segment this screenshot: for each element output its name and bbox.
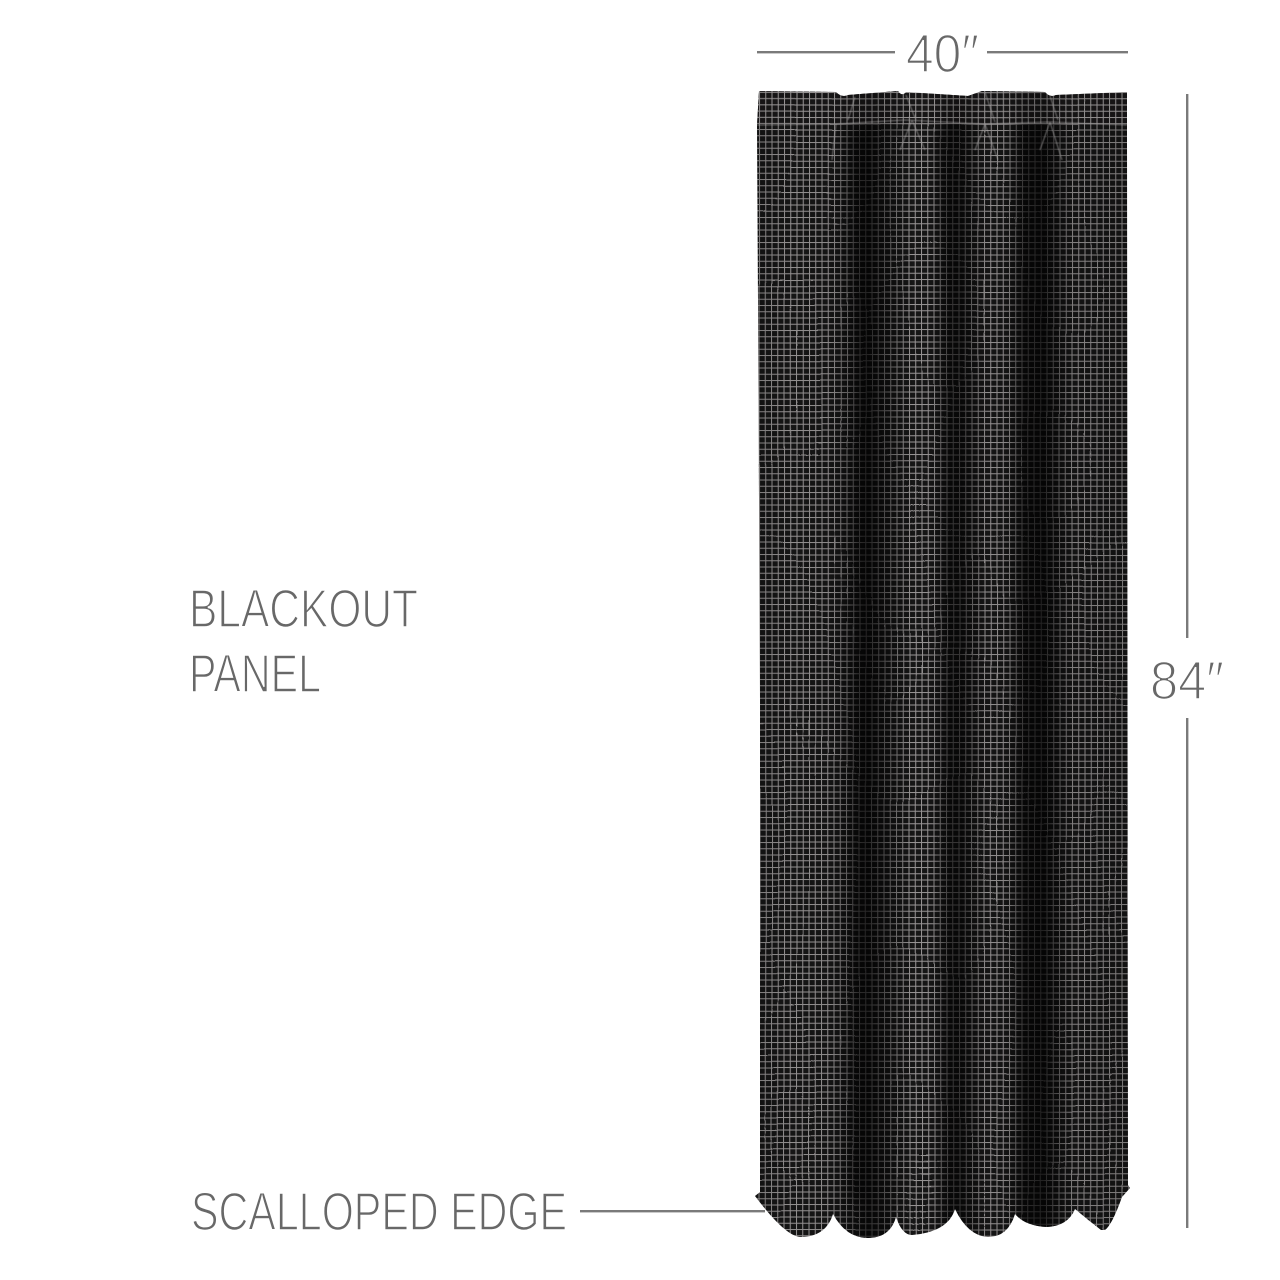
width value: 40″ — [906, 24, 979, 84]
fold shadow accents — [850, 130, 950, 1200]
label line 1: BLACKOUT — [189, 579, 418, 639]
curtain panel — [755, 91, 1130, 1238]
top gathered casing — [757, 91, 1127, 124]
fabric folds shading — [755, 91, 1130, 1238]
width line right — [987, 51, 1128, 53]
width line left — [757, 51, 895, 53]
callout leader line — [580, 1210, 765, 1212]
label: blackout panel — [189, 579, 418, 704]
label line 2: PANEL — [189, 644, 321, 704]
height value: 84″ — [1150, 651, 1224, 711]
height line top — [1186, 94, 1188, 638]
height line bottom — [1186, 718, 1188, 1228]
rod pocket stitching and gathers — [757, 92, 1127, 160]
fabric: woven check pattern — [755, 91, 1130, 1238]
callout text: SCALLOPED EDGE — [191, 1182, 567, 1242]
